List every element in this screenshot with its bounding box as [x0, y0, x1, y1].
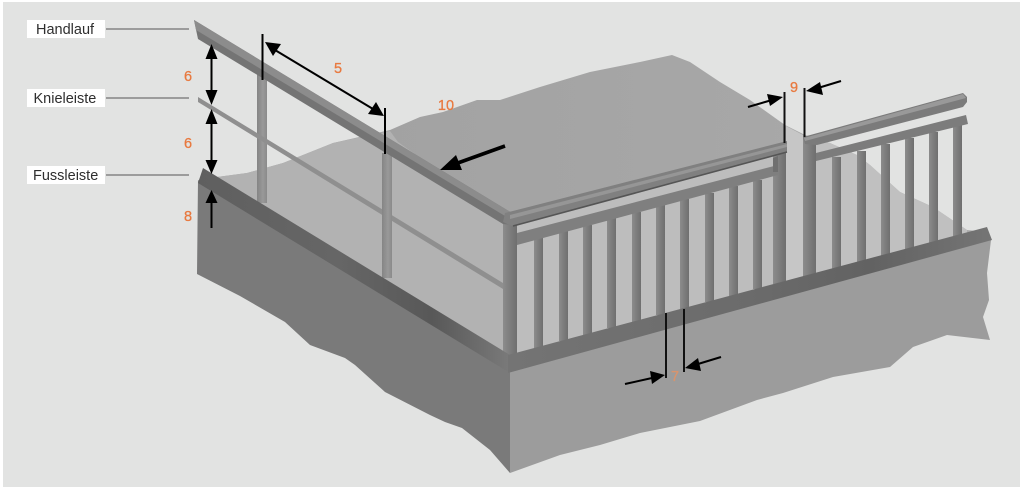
large arrow pointing at hand rail — [440, 146, 505, 170]
floor surface — [203, 55, 988, 356]
dimension: 7 — [625, 309, 721, 384]
dimension arrow: lower 6 — [206, 109, 218, 174]
number 5: 5 — [334, 61, 342, 77]
mid rail, front section — [517, 165, 778, 245]
corner post — [503, 222, 517, 356]
floor behind right railing — [816, 139, 967, 278]
left wall — [197, 180, 510, 473]
mid rail, right section — [816, 115, 968, 161]
number 7: 7 — [671, 369, 679, 385]
left post 2 — [382, 153, 392, 278]
label: Fussleiste: Fussleiste — [33, 168, 98, 184]
dimension: 5 — [262, 34, 385, 154]
dimension: 9 — [748, 81, 841, 143]
label: Fussleiste — [27, 166, 189, 184]
post 2 overlap — [382, 205, 392, 278]
toe board, front — [508, 227, 992, 373]
label: Knieleiste: Knieleiste — [34, 91, 96, 107]
front wall — [510, 240, 991, 473]
number 6 upper: 6 — [184, 69, 192, 85]
toe board, left — [198, 168, 510, 373]
balusters, right section — [803, 122, 962, 278]
label: Knieleiste — [27, 89, 189, 107]
label: Handlauf — [27, 20, 189, 38]
number 9: 9 — [790, 80, 798, 96]
hand rail, right — [803, 93, 967, 145]
lighter floor seen through left railing — [217, 131, 505, 352]
dimension arrow: upper 6 — [206, 44, 218, 105]
number 6 lower: 6 — [184, 136, 192, 152]
number 8: 8 — [184, 209, 192, 225]
mid rail return — [773, 156, 778, 172]
label: Handlauf: Handlauf — [36, 22, 95, 38]
gap between railing sections — [786, 126, 803, 283]
number 10: 10 — [438, 98, 454, 114]
knee rail — [198, 97, 503, 289]
left post 1 — [257, 73, 267, 203]
hand rail, front — [503, 141, 787, 226]
hand rail, left — [194, 20, 512, 225]
dimension arrow: 8 — [206, 190, 218, 228]
lighter floor seen through front railing — [515, 153, 786, 356]
balusters, front section — [534, 150, 786, 348]
